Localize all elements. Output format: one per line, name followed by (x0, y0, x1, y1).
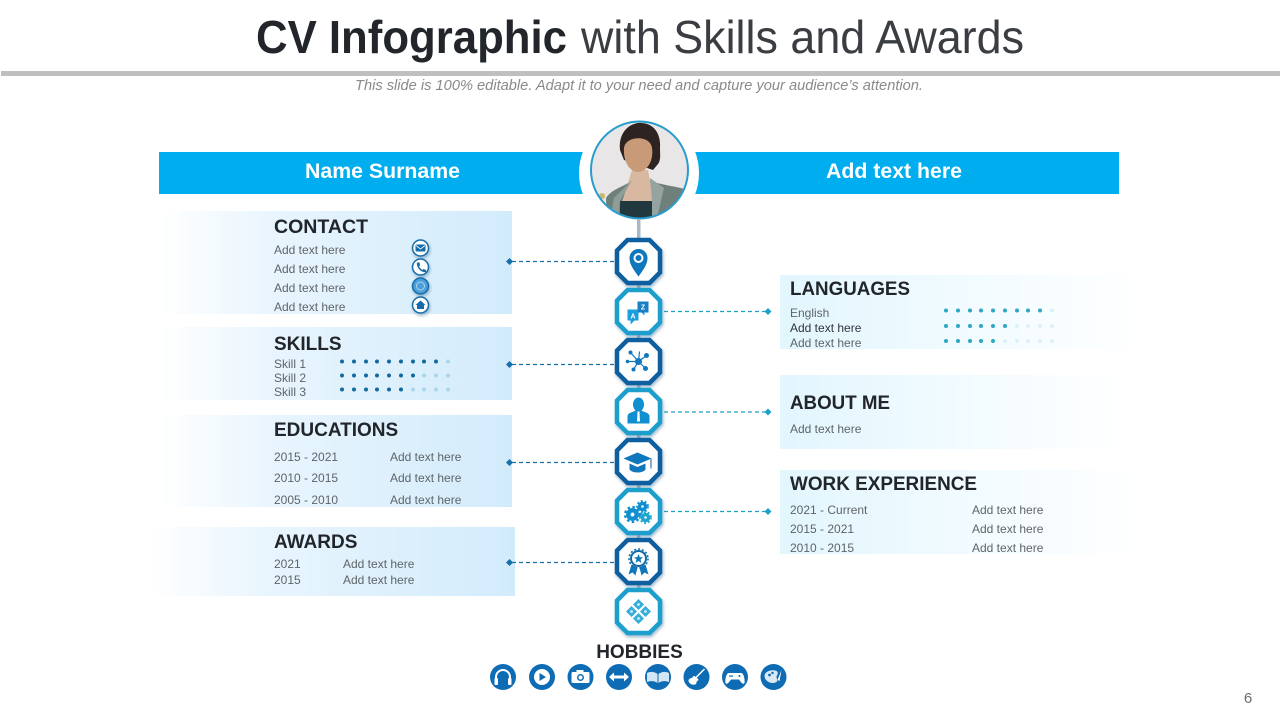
panel: awards: 2015 (274, 573, 301, 587)
panel: contact: Add text here (274, 281, 346, 295)
panel: skills: SKILLS (274, 334, 342, 355)
icon: guitar (684, 664, 710, 690)
icon: award ribbon (617, 540, 660, 583)
icon: languages: A (630, 314, 636, 320)
contact icons (412, 240, 428, 313)
title (256, 11, 1024, 63)
icon: paint palette (760, 664, 786, 690)
panel: contact (159, 211, 512, 314)
panel: skills: Skill 1 (274, 357, 306, 371)
icon: game controller (722, 664, 748, 690)
panel: work experience: Add text here (972, 503, 1044, 517)
panel: awards: AWARDS (274, 532, 357, 553)
panel: awards: Add text here (343, 557, 415, 571)
panel: contact: Add text here (274, 300, 346, 314)
panel: work experience: 2021 - Current (790, 503, 868, 517)
panel: contact: Add text here (274, 243, 346, 257)
icon: play (529, 664, 555, 690)
icon: location pin (617, 240, 660, 283)
header bar: name (159, 152, 599, 194)
header bar: name: Name Surname (305, 160, 460, 183)
panel: about me: ABOUT ME (790, 393, 890, 414)
timeline spine (637, 219, 640, 615)
connectors: right panels (664, 308, 772, 515)
icon: gears (617, 490, 660, 533)
icon: dumbbell arrows (606, 664, 632, 690)
panel: awards (150, 527, 515, 596)
title: CV Infographic (256, 11, 567, 63)
panel: work experience: Add text here (972, 522, 1044, 536)
panel: skills: Skill 2 (274, 371, 306, 385)
panel: educations: 2005 - 2010 (274, 493, 338, 507)
title rule (1, 71, 1280, 76)
language rating dots (944, 308, 1054, 343)
panel: work experience: 2010 - 2015 (790, 541, 854, 555)
icon: languages (617, 290, 660, 333)
portrait photo (579, 120, 699, 220)
panel: work experience: 2015 - 2021 (790, 522, 854, 536)
panel: contact: CONTACT (274, 217, 368, 238)
header bar: add text (680, 152, 1119, 194)
panel: awards: 2021 (274, 557, 301, 571)
panel: contact: Add text here (274, 262, 346, 276)
icon: camera (568, 664, 594, 690)
panel: educations: Add text here (390, 471, 462, 485)
panel: skills (159, 327, 512, 400)
panel: about me (780, 375, 1125, 449)
panel: educations: 2015 - 2021 (274, 450, 338, 464)
panel: awards: Add text here (343, 573, 415, 587)
panel: work experience (780, 470, 1145, 555)
hobby icons row (490, 664, 786, 690)
icon: network (617, 340, 660, 383)
panel: work experience: WORK EXPERIENCE (790, 474, 977, 495)
panel: skills: Skill 3 (274, 385, 306, 399)
panel: languages: Add text here (790, 336, 862, 350)
icon: graduation cap (617, 440, 660, 483)
icon: headphones (490, 664, 516, 690)
panel: educations: Add text here (390, 493, 462, 507)
panel: languages: English (790, 306, 829, 320)
page number: 6 (1244, 690, 1252, 707)
panel: educations: EDUCATIONS (274, 420, 398, 441)
icon: hobbies (617, 590, 660, 633)
panel: languages: Add text here (790, 321, 862, 335)
icon: languages: Z (641, 304, 646, 312)
panel: educations: 2010 - 2015 (274, 471, 338, 485)
title: with Skills and Awards (580, 11, 1024, 63)
header bar: add text: Add text here (826, 160, 962, 183)
panel: work experience: Add text here (972, 541, 1044, 555)
hobbies heading: HOBBIES (596, 642, 683, 663)
skill rating dots (340, 360, 450, 392)
panel: educations: Add text here (390, 450, 462, 464)
subtitle: This slide is 100% editable. Adapt it to your need and capture your audience’s attention. (355, 78, 923, 94)
connectors: left panels (506, 258, 614, 566)
icon: person (617, 390, 660, 433)
panel: languages: LANGUAGES (790, 279, 910, 300)
panel: languages (780, 275, 1145, 350)
panel: educations (159, 415, 512, 507)
panel: about me: Add text here (790, 422, 862, 436)
icon: open book (645, 664, 671, 690)
